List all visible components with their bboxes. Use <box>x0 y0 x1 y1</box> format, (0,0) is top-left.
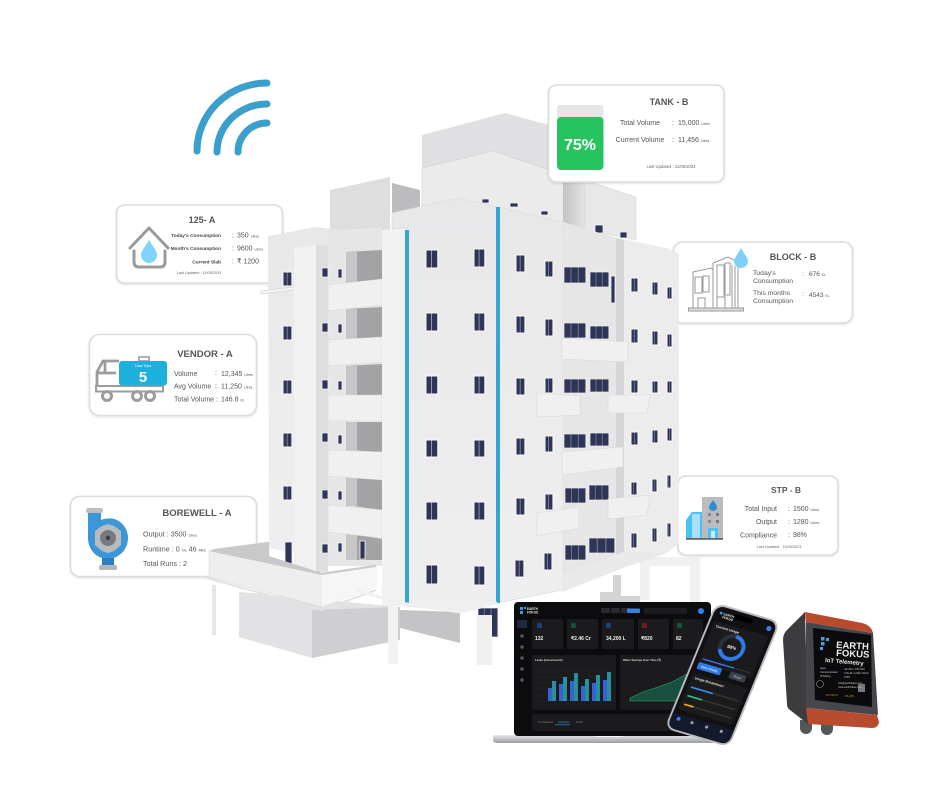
strip and main walls <box>382 228 407 606</box>
icon: buildings with drop <box>688 248 748 311</box>
icon: tank level 75 percent: 75% <box>564 137 596 154</box>
text: consumption rows: Month's Consumption <box>171 246 221 252</box>
heading: borewell A: BOREWELL - A <box>162 508 232 519</box>
laptop bottom tabs: Facilities <box>558 720 570 724</box>
ribbon windows <box>564 267 586 283</box>
panel: STP B <box>678 476 838 555</box>
main windows <box>426 250 438 268</box>
chart: water savings area: Water Savings Over Time (₹) <box>623 658 661 662</box>
label on box: : 12-24V / 230 VAC <box>843 667 865 671</box>
laptop KPI cards: 132 <box>535 636 544 642</box>
panel: flat 125-A <box>116 205 282 283</box>
label on box: Communication <box>820 670 839 674</box>
label on box: IoT Telemetry <box>825 658 864 667</box>
illustration: apartment building <box>207 113 700 665</box>
device: IoT telemetry box <box>783 612 879 735</box>
text: vendor rows: Volume <box>174 371 197 378</box>
laptop bottom tabs <box>532 714 702 731</box>
text: consumption rows: : <box>232 246 234 252</box>
panel: vendor A <box>90 334 256 416</box>
left roof block <box>330 177 390 232</box>
label on box: DC INPUT <box>826 693 839 697</box>
phone current usage donut: 68% <box>727 644 737 651</box>
label on box: IP Rating <box>820 674 831 678</box>
blue pipes <box>405 230 409 603</box>
left wing windows <box>283 272 292 286</box>
text: consumption rows: Last Updated : 11/05/2023 <box>177 271 221 275</box>
text: STP rows: : <box>788 519 790 526</box>
panel: block B <box>674 242 852 323</box>
icon: wifi signal <box>197 83 267 152</box>
laptop bottom tabs: Units <box>576 720 583 724</box>
laptop KPI cards <box>532 619 703 649</box>
text: vendor rows: 11,250 Litres <box>221 384 253 390</box>
text: tank rows: Current Volume <box>616 137 664 144</box>
text: block rows: 4543 KL <box>809 292 830 299</box>
laptop KPI cards: ₹820 <box>641 636 653 642</box>
device: laptop dashboard <box>493 602 716 743</box>
text: borewell rows: Total Runs : 2 <box>143 559 187 568</box>
text: vendor rows: 146.8 KL <box>221 396 245 404</box>
phone current usage donut: Current Usage <box>715 624 740 635</box>
phone header: FOKUS <box>722 615 734 622</box>
chart: leaks bar chart <box>532 655 616 710</box>
heading: 125-A: 125- A <box>189 215 216 225</box>
laptop KPI cards: ₹2.46 Cr <box>571 636 591 642</box>
text: block rows: This months <box>753 290 791 297</box>
small strip windows <box>322 268 342 553</box>
label on box: RS-485 <box>845 694 854 698</box>
icon: water truck <box>96 357 167 400</box>
text: STP rows: Total Input <box>745 506 777 513</box>
text: tank rows <box>616 120 710 169</box>
text: block rows: 676 KL <box>809 271 826 278</box>
text: STP rows: Last Updated : 15/05/2023 <box>757 545 801 549</box>
right wing windows <box>631 278 638 292</box>
text: block rows: Today's <box>753 270 776 277</box>
label on box: Input <box>820 666 826 670</box>
device: phone <box>664 603 781 747</box>
text: vendor rows <box>174 370 253 404</box>
text: borewell rows: Runtime : 0 hrs 46 Mins <box>143 544 206 554</box>
text: STP rows: Compliance <box>740 532 777 540</box>
text: block rows: Consumption <box>753 298 793 305</box>
phone current usage donut <box>698 621 768 678</box>
icon: water truck: 5 <box>139 369 147 386</box>
text: block rows <box>753 270 830 305</box>
heading: STP B: STP - B <box>771 485 801 495</box>
chart: leaks bar chart: Leaks (Litres/month) <box>535 658 563 662</box>
label on box: : LTE-M / LoRa / Wi-Fi <box>843 671 869 675</box>
laptop bottom tabs: Companies <box>538 720 554 724</box>
laptop top bar: FOKUS <box>527 610 538 614</box>
heading: vendor A: VENDOR - A <box>177 349 233 360</box>
recess balconies <box>328 279 382 311</box>
text: vendor rows: : <box>215 370 217 377</box>
icon: water truck: Total Trips <box>135 364 151 368</box>
panel: tank B <box>548 85 724 182</box>
text: consumption rows: 9600 Litres <box>237 246 263 252</box>
text: vendor rows: Avg Volume <box>174 384 211 390</box>
text: tank rows: Total Volume <box>620 120 660 127</box>
text: vendor rows: 12,345 Litres <box>221 371 253 378</box>
stilts under right wing <box>640 557 700 620</box>
phone buttons: View Details <box>700 665 719 673</box>
laptop top bar <box>520 607 704 614</box>
icon: house with water drop <box>130 228 168 267</box>
text: tank rows: Last Updated : 11/05/2023 <box>646 164 696 169</box>
text: consumption rows: Current Slab <box>192 260 221 266</box>
text: consumption rows: ₹ 1200 <box>237 258 259 266</box>
text: tank rows: 11,456 Litres <box>678 137 710 144</box>
left wing <box>268 227 337 562</box>
text: STP rows: 1280 Litres <box>793 519 819 526</box>
text: consumption rows: 350 Litres <box>237 232 259 240</box>
text: borewell rows <box>143 530 206 568</box>
icon: tank level 75 percent <box>557 105 604 170</box>
icon: pump <box>86 508 128 570</box>
text: vendor rows: Total Volume : <box>174 396 218 404</box>
text: tank rows: 15,000 Litres <box>678 120 710 127</box>
text: consumption rows: Today's Consumption <box>171 233 221 239</box>
laptop KPI cards: 34,200 L <box>606 636 626 642</box>
podium <box>239 592 400 658</box>
text: vendor rows: : <box>215 383 217 390</box>
icon: treatment plant <box>686 497 723 540</box>
upper towers <box>422 113 560 176</box>
text: block rows: : <box>802 271 804 278</box>
phone header <box>718 611 772 633</box>
phone usage breakdown <box>678 673 747 725</box>
phone nav bar <box>667 712 734 745</box>
phone buttons: Share <box>732 674 742 680</box>
label on box: : IP65 <box>843 675 850 679</box>
text: STP rows: : <box>788 506 790 513</box>
text: consumption rows: : <box>232 232 234 240</box>
recess <box>328 228 382 566</box>
label on box: www.earthfokus.com <box>838 685 862 689</box>
chart: water savings area <box>620 655 704 710</box>
phone buttons <box>696 662 747 683</box>
text: consumption rows: : <box>232 258 234 266</box>
panel: borewell A <box>70 496 256 576</box>
phone usage breakdown: Usage Breakdown <box>694 676 724 688</box>
phone header: EARTH <box>723 612 735 619</box>
text: STP rows: 1500 Litres <box>793 506 819 513</box>
balconies <box>562 338 628 362</box>
heading: block B: BLOCK - B <box>770 252 817 262</box>
text: tank rows: : <box>672 137 674 144</box>
text: tank rows: : <box>672 120 674 127</box>
laptop sidebar <box>517 620 527 682</box>
text: STP rows: : <box>788 532 790 539</box>
label on box <box>816 637 870 698</box>
text: block rows: : <box>802 291 804 298</box>
cable glands <box>800 720 833 735</box>
laptop KPI cards: 82 <box>676 636 682 642</box>
label on box: FOKUS <box>836 648 870 661</box>
text: STP rows <box>740 506 819 549</box>
laptop top bar: EARTH <box>527 607 539 611</box>
label on box: info@earthfokus.com <box>838 681 863 685</box>
heading: tank B: TANK - B <box>650 97 689 107</box>
text: consumption rows <box>171 232 263 275</box>
text: STP rows: 98% <box>793 532 807 539</box>
label on box: EARTH <box>836 640 869 653</box>
text: borewell rows: Output : 3500 Litres <box>143 530 197 538</box>
text: STP rows: Output <box>756 519 777 526</box>
text: block rows: Consumption <box>753 278 793 285</box>
